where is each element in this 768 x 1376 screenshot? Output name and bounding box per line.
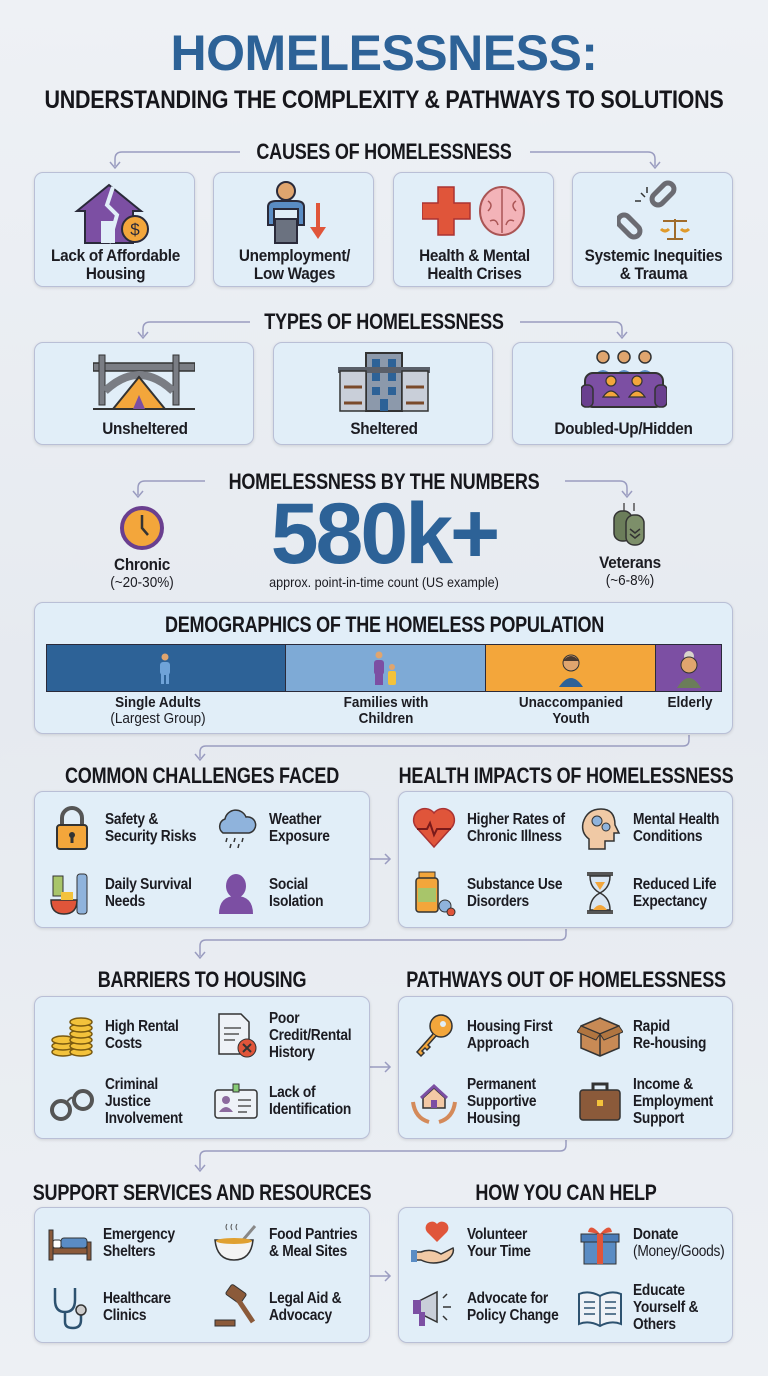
icon: clock — [120, 506, 164, 550]
item: advocate — [413, 1290, 558, 1326]
item: criminal justice: Criminal — [105, 1076, 158, 1092]
icon: broken house: $ — [130, 220, 140, 239]
item: mental health: Conditions — [633, 828, 702, 845]
title: HOMELESSNESS: — [171, 25, 597, 81]
item: healthcare clinics — [54, 1288, 171, 1330]
heading: demographics: DEMOGRAPHICS OF THE HOMELESS POPULATION — [165, 612, 604, 637]
item: food pantries — [214, 1224, 358, 1261]
panel: demographics — [34, 602, 733, 734]
heading: support: SUPPORT SERVICES AND RESOURCES — [33, 1180, 371, 1205]
item: identification: Identification — [269, 1101, 351, 1118]
card: affordable housing: Housing — [86, 264, 145, 283]
item: housing first: Housing First — [467, 1018, 552, 1035]
card: unsheltered — [34, 342, 254, 445]
item: income support: Employment — [633, 1092, 713, 1110]
panel: support services — [34, 1207, 370, 1343]
stat: chronic: (~20-30%) — [110, 574, 174, 591]
card: health: Health Crises — [427, 264, 522, 283]
item: housing first — [416, 1014, 552, 1057]
icon: person with arrow — [267, 181, 326, 244]
card: doubled-up: Doubled-Up/Hidden — [554, 419, 693, 438]
panel: types — [33, 342, 734, 447]
item: weather: Exposure — [269, 828, 330, 845]
item: daily survival — [50, 874, 192, 915]
item: substance — [415, 872, 562, 916]
labels: demographics: Unaccompanied — [519, 694, 623, 711]
item: poor credit: History — [269, 1044, 315, 1060]
heading: health impacts: HEALTH IMPACTS OF HOMELESSNESS — [399, 763, 733, 788]
panel: barriers — [34, 996, 370, 1139]
item: safety: Safety & — [105, 811, 158, 828]
card: health: Health & Mental — [419, 246, 530, 265]
item: criminal justice: Involvement — [105, 1110, 182, 1126]
item: rapid re-housing — [577, 1017, 706, 1057]
item: life expectancy — [587, 872, 716, 914]
item: legal aid — [214, 1284, 342, 1326]
icon: bridge and tent — [93, 354, 195, 410]
icon: cross and brain — [422, 186, 525, 236]
card: sheltered: Sheltered — [350, 419, 418, 438]
item: rental costs — [51, 1017, 179, 1057]
labels: demographics — [110, 694, 713, 727]
item: advocate: Advocate for — [467, 1290, 548, 1307]
panel: pathways — [398, 996, 733, 1139]
item: rapid re-housing: Rapid — [633, 1018, 670, 1035]
item: advocate: Policy Change — [467, 1307, 558, 1324]
item: poor credit — [218, 1010, 351, 1060]
item: permanent supportive: Supportive — [467, 1092, 536, 1110]
card: unemployment: Unemployment/ — [239, 246, 350, 265]
card: systemic: & Trauma — [620, 264, 687, 283]
item: chronic illness: Chronic Illness — [467, 828, 562, 845]
item: daily survival: Daily Survival — [105, 876, 192, 893]
heading: numbers: HOMELESSNESS BY THE NUMBERS — [229, 469, 539, 494]
card: unsheltered: Unsheltered — [102, 419, 188, 438]
card: unemployment: Low Wages — [254, 264, 335, 283]
item: poor credit: Poor — [269, 1010, 299, 1026]
icon: broken chain and scale — [617, 180, 690, 240]
labels: demographics: Single Adults — [115, 694, 201, 711]
item: mental health — [582, 808, 719, 850]
card: systemic — [572, 172, 733, 287]
item: educate: Yourself & — [633, 1298, 698, 1316]
icon: shelter building — [338, 352, 430, 412]
heading: help: HOW YOU CAN HELP — [475, 1180, 657, 1205]
stat: chronic — [110, 506, 174, 591]
item: healthcare clinics: Healthcare — [103, 1290, 171, 1307]
item: life expectancy: Expectancy — [633, 893, 707, 910]
card: affordable housing — [34, 172, 195, 287]
item: rapid re-housing: Re-housing — [633, 1035, 706, 1052]
stat: veterans — [599, 503, 661, 589]
item: legal aid: Advocacy — [269, 1307, 332, 1324]
icon: broken house — [74, 184, 149, 244]
item: donate: Donate — [633, 1226, 678, 1243]
item: poor credit: Credit/Rental — [269, 1026, 351, 1044]
item: criminal justice: Justice — [105, 1092, 151, 1110]
item: emergency shelters: Emergency — [103, 1226, 175, 1243]
panel: health impacts — [398, 791, 733, 928]
panel: causes — [33, 172, 734, 289]
item: substance: Substance Use — [467, 876, 562, 893]
card: doubled-up — [512, 342, 733, 445]
item: income support — [579, 1076, 714, 1126]
item: life expectancy: Reduced Life — [633, 876, 716, 893]
stat: 580k+: approx. point-in-time count (US example) — [269, 574, 499, 590]
item: mental health: Mental Health — [633, 811, 719, 828]
item: isolation — [219, 874, 323, 914]
item: chronic illness — [412, 808, 566, 848]
stat: veterans: Veterans — [599, 553, 661, 572]
item: safety — [56, 806, 196, 850]
stat: chronic: Chronic — [114, 555, 170, 574]
item: food pantries: & Meal Sites — [269, 1243, 347, 1260]
item: isolation: Isolation — [269, 893, 323, 910]
item: income support: Support — [633, 1110, 684, 1126]
card: sheltered — [273, 342, 493, 445]
heading: barriers: BARRIERS TO HOUSING — [98, 967, 306, 992]
card: affordable housing: Lack of Affordable — [51, 246, 180, 265]
stat: veterans: (~6-8%) — [606, 572, 654, 589]
item: substance: Disorders — [467, 893, 529, 910]
labels: demographics: Elderly — [667, 694, 713, 711]
item: isolation: Social — [269, 876, 308, 893]
item: volunteer: Volunteer — [467, 1226, 527, 1243]
icon: dog tags — [613, 503, 645, 546]
item: chronic illness: Higher Rates of — [467, 811, 565, 828]
card: unemployment — [213, 172, 374, 287]
item: identification — [214, 1084, 351, 1119]
item: emergency shelters — [48, 1226, 175, 1260]
item: permanent supportive: Permanent — [467, 1076, 536, 1092]
item: educate — [578, 1282, 698, 1332]
labels: demographics: Families with — [344, 694, 428, 711]
item: volunteer: Your Time — [467, 1243, 531, 1260]
heading: challenges: COMMON CHALLENGES FACED — [65, 763, 339, 788]
item: criminal justice — [50, 1076, 183, 1126]
stat: 580k+: 580k+ — [271, 486, 497, 582]
item: identification: Lack of — [269, 1084, 315, 1101]
labels: demographics: Children — [359, 710, 413, 727]
icon: people on couch — [581, 350, 667, 408]
card: health — [393, 172, 554, 287]
labels: demographics: Youth — [552, 710, 590, 727]
card: systemic: Systemic Inequities — [585, 246, 722, 265]
item: donate: (Money/Goods) — [633, 1243, 724, 1260]
item: rental costs: High Rental — [105, 1018, 179, 1035]
item: volunteer — [411, 1222, 531, 1264]
item: educate: Others — [633, 1316, 676, 1332]
item: educate: Educate — [633, 1282, 685, 1298]
item: income support: Income & — [633, 1076, 693, 1092]
subtitle: UNDERSTANDING THE COMPLEXITY & PATHWAYS TO SOLUTIONS — [44, 86, 724, 114]
panel: challenges — [34, 791, 370, 928]
heading: causes: CAUSES OF HOMELESSNESS — [256, 139, 512, 164]
item: safety: Security Risks — [105, 828, 196, 845]
item: food pantries: Food Pantries — [269, 1226, 357, 1243]
item: emergency shelters: Shelters — [103, 1243, 155, 1260]
item: legal aid: Legal Aid & — [269, 1290, 341, 1307]
heading: types: TYPES OF HOMELESSNESS — [264, 309, 504, 334]
item: housing first: Approach — [467, 1035, 529, 1052]
item: rental costs: Costs — [105, 1035, 142, 1052]
item: daily survival: Needs — [105, 893, 145, 910]
item: permanent supportive: Housing — [467, 1110, 520, 1126]
item: permanent supportive — [411, 1076, 536, 1126]
bar chart: demographics — [46, 644, 722, 692]
panel: how you can help — [398, 1207, 733, 1343]
item: weather — [218, 809, 330, 848]
item: healthcare clinics: Clinics — [103, 1307, 146, 1324]
labels: demographics: (Largest Group) — [110, 710, 206, 727]
item: donate — [580, 1226, 724, 1264]
item: weather: Weather — [269, 811, 321, 828]
heading: pathways: PATHWAYS OUT OF HOMELESSNESS — [406, 967, 726, 992]
